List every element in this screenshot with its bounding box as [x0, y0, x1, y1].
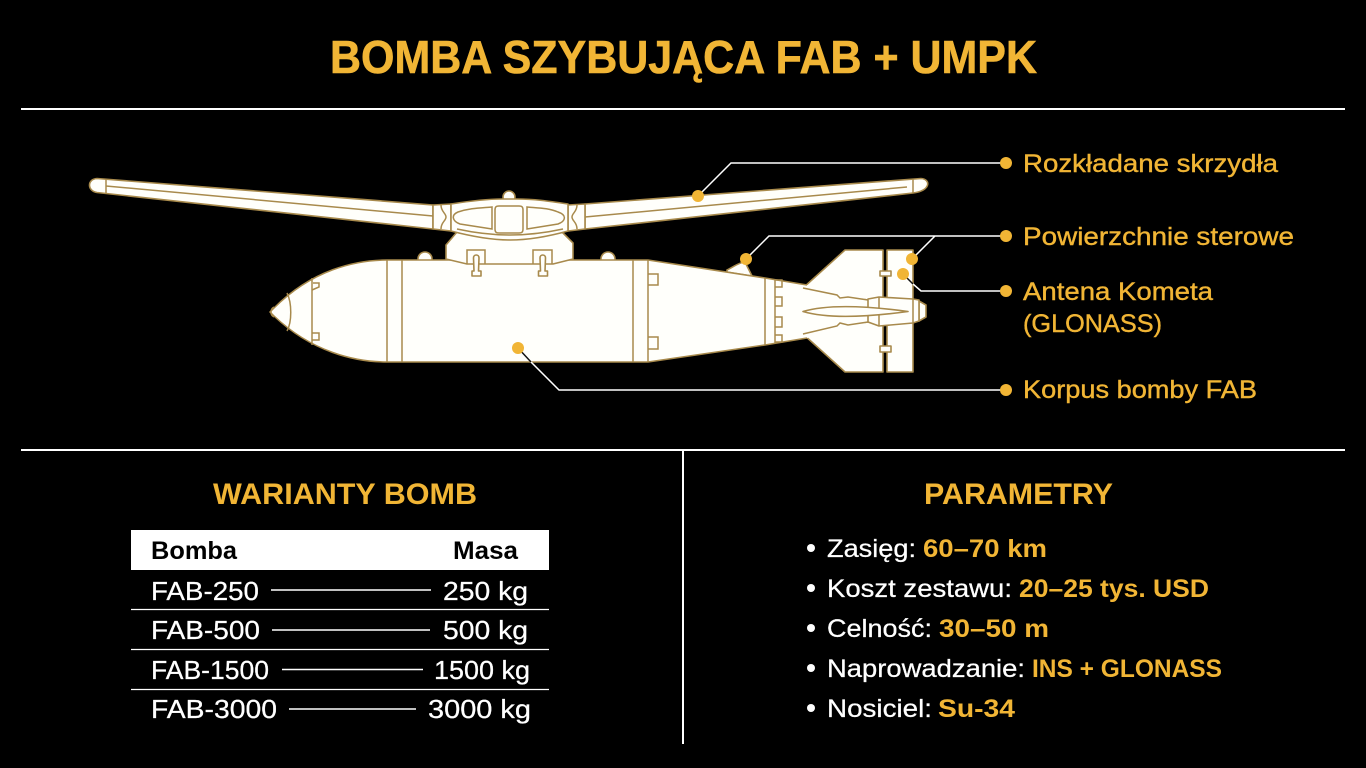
list: parameters: 30–50 m	[939, 615, 1049, 643]
list: parameters	[807, 535, 1222, 723]
callout: control surfaces	[740, 223, 1294, 265]
callout: Kometa antenna	[897, 268, 1213, 338]
list: parameters: 20–25 tys. USD	[1019, 575, 1209, 603]
table: bomb variants: 1500 kg	[434, 655, 530, 685]
body bumps and antenna	[418, 252, 752, 276]
callout: Kometa antenna: Antena Kometa	[1023, 278, 1213, 306]
table: bomb variants: FAB-3000	[151, 694, 277, 724]
callout: control surfaces: Powierzchnie sterowe	[1023, 223, 1294, 251]
table: bomb variants	[131, 530, 549, 724]
heading: parameters: PARAMETRY	[924, 478, 1113, 511]
list: parameters: Celność:	[827, 615, 932, 643]
tail fins	[803, 250, 913, 372]
table: bomb variants: Bomba	[151, 537, 238, 565]
bomb body	[270, 260, 870, 362]
list: parameters: Zasięg:	[827, 535, 916, 563]
list: parameters: Naprowadzanie:	[827, 655, 1025, 683]
right wing	[568, 178, 928, 231]
table: bomb variants: FAB-250	[151, 576, 259, 606]
mounting pylon	[446, 232, 573, 276]
table: bomb variants: 250 kg	[443, 576, 528, 606]
table: bomb variants: 3000 kg	[428, 694, 531, 724]
callout: FAB body: Korpus bomby FAB	[1023, 376, 1257, 404]
callout: wings: Rozkładane skrzydła	[1023, 150, 1278, 178]
callout: wings	[692, 150, 1278, 202]
callout: FAB body	[512, 342, 1257, 404]
table: bomb variants: FAB-1500	[151, 655, 269, 685]
table: bomb variants: Masa	[453, 537, 519, 565]
table: bomb variants: 500 kg	[443, 615, 528, 645]
list: parameters: 60–70 km	[923, 535, 1047, 563]
list: parameters: Nosiciel:	[827, 695, 932, 723]
diagram: FAB bomb with UMPK kit	[90, 178, 928, 372]
heading: variants: WARIANTY BOMB	[213, 478, 477, 511]
table: bomb variants: FAB-500	[151, 615, 260, 645]
callout: Kometa antenna: (GLONASS)	[1023, 310, 1162, 338]
tail cone	[803, 297, 926, 326]
title: BOMBA SZYBUJĄCA FAB + UMPK	[330, 31, 1037, 83]
list: parameters: INS + GLONASS	[1032, 655, 1222, 683]
list: parameters: Koszt zestawu:	[827, 575, 1012, 603]
list: parameters: Su-34	[938, 695, 1015, 723]
left wing	[90, 178, 451, 231]
center fairing	[451, 191, 568, 240]
